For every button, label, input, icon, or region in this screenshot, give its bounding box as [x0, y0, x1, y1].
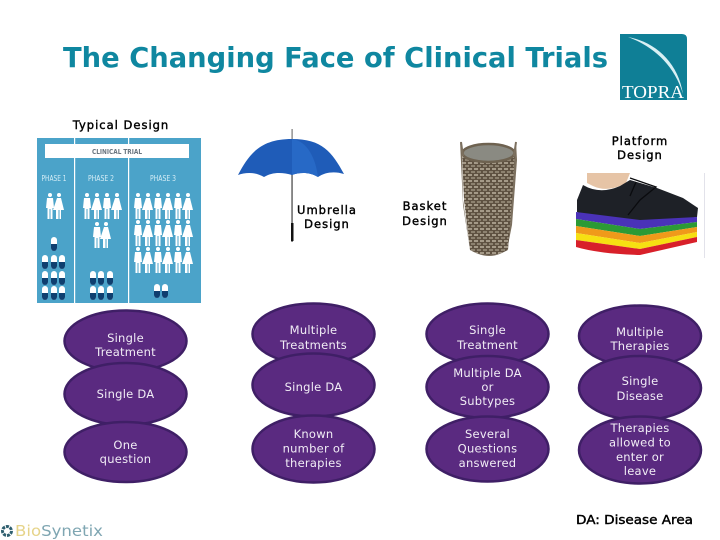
oval: single treatment: Treatment — [456, 338, 518, 352]
oval: single DA — [252, 354, 374, 416]
oval: single DA — [64, 363, 186, 425]
label: platform design: Platform — [612, 134, 668, 148]
oval: multiple DA or subtypes: Multiple DA — [453, 366, 522, 380]
chart: clinical trial phases: PHASE 1 — [42, 174, 67, 183]
legend: DA disease area: DA: Disease Area — [576, 513, 693, 527]
column: platform design — [579, 306, 701, 484]
oval: known number of therapies: Known — [294, 427, 333, 441]
oval: known number of therapies — [252, 416, 374, 482]
chart: clinical trial phases — [37, 138, 201, 303]
oval: multiple DA or subtypes — [426, 356, 548, 418]
icon: TOPRA logo: TOPRA — [622, 82, 684, 102]
oval: multiple therapies — [579, 306, 701, 366]
oval: single DA: Single DA — [97, 387, 154, 401]
oval: therapies allowed to enter or leave: Therapies — [611, 421, 669, 435]
column: basket design — [426, 304, 548, 482]
oval: single treatment — [64, 310, 186, 372]
oval: multiple DA or subtypes: or — [481, 380, 494, 394]
oval: single treatment: Single — [107, 331, 144, 345]
column: umbrella design — [252, 304, 374, 482]
column: typical design — [64, 310, 186, 482]
heading: typical design: Typical Design — [72, 118, 169, 132]
chart: clinical trial phases: CLINICAL TRIAL — [92, 148, 142, 156]
oval: several questions answered: Several — [465, 427, 510, 441]
oval: single disease — [579, 356, 701, 420]
oval: single DA: Single DA — [285, 380, 342, 394]
oval: single disease: Single — [622, 374, 658, 388]
oval: single treatment: Single — [469, 323, 506, 337]
icon: umbrella — [238, 129, 344, 242]
icon: TOPRA logo — [620, 34, 687, 102]
oval: therapies allowed to enter or leave: enter or — [616, 450, 664, 464]
oval: therapies allowed to enter or leave — [579, 416, 701, 484]
oval: several questions answered: Questions — [458, 442, 517, 456]
chart: clinical trial phases: PHASE 2 — [88, 174, 114, 183]
oval: several questions answered — [426, 416, 548, 482]
oval: single disease: Disease — [617, 389, 663, 403]
label: umbrella design: Design — [304, 217, 350, 231]
oval: single treatment: Treatment — [94, 345, 156, 359]
oval: one question — [64, 422, 186, 482]
oval: one question: One — [113, 438, 138, 452]
oval: known number of therapies: number of — [283, 442, 345, 456]
oval: one question: question — [100, 452, 151, 466]
label: basket design: Basket — [403, 199, 447, 213]
oval: multiple treatments — [252, 304, 374, 364]
logo: BioSynetix: BioSynetix — [15, 522, 103, 540]
icon: wicker basket — [460, 141, 517, 256]
oval: multiple therapies: Multiple — [616, 325, 664, 339]
label: umbrella design: Umbrella — [297, 203, 357, 217]
icon: rainbow platform shoe — [576, 173, 705, 258]
oval: therapies allowed to enter or leave: allowed to — [609, 436, 671, 450]
oval: multiple therapies: Therapies — [610, 339, 669, 353]
oval: multiple treatments: Treatments — [279, 338, 347, 352]
label: platform design: Design — [617, 148, 663, 162]
oval: multiple DA or subtypes: Subtypes — [460, 394, 515, 408]
oval: single treatment — [426, 304, 548, 364]
oval: multiple treatments: Multiple — [290, 323, 337, 337]
oval: several questions answered: answered — [459, 456, 516, 470]
oval: therapies allowed to enter or leave: leave — [624, 464, 656, 478]
title: The Changing Face of Clinical Trials — [63, 41, 608, 74]
label: basket design: Design — [402, 214, 448, 228]
chart: clinical trial phases: PHASE 3 — [150, 174, 176, 183]
oval: known number of therapies: therapies — [285, 456, 342, 470]
